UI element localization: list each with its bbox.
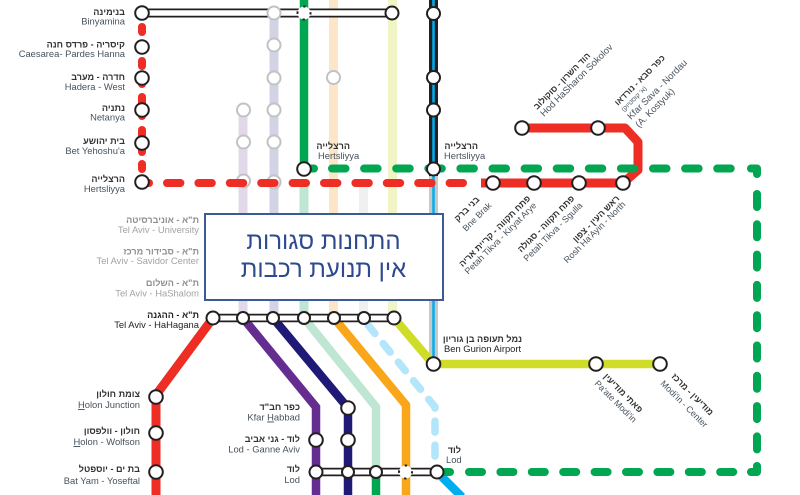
line: red dashed [142, 27, 470, 183]
label: Modiin Center: מודיעין - מרכז [670, 371, 716, 417]
interchange stations [298, 6, 412, 478]
label: Bet Yehoshua [65, 136, 126, 156]
label: Petah Tikva Kiryat Arye: פתח תקווה - קריית אריה [457, 193, 533, 269]
label: Holon Junction: Holon Junction [78, 399, 140, 410]
double track: HaHagana [213, 314, 394, 322]
label: Hertsliyya east [444, 141, 486, 161]
label: Tel Aviv HaHagana: ת"א - ההגנה [147, 310, 199, 320]
label: Rosh HaAyin North: ראש העין - צפון [571, 193, 621, 244]
label: Caesarea [19, 40, 126, 59]
label: Hertsliyya east: Hertsliyya [444, 150, 486, 161]
label: Netanya: נתניה [102, 103, 125, 113]
label: Binyamina: בנימינה [93, 7, 125, 17]
label: Holon Wolfson [73, 426, 140, 447]
label: Tel Aviv HaHagana [114, 310, 200, 330]
line: light blue dashed [368, 325, 435, 472]
label: Hertsliyya west [84, 174, 126, 194]
label: Bat Yam [64, 464, 140, 486]
label: Lod west [284, 464, 300, 485]
double track: Binyamina [142, 8, 392, 18]
label: Netanya [90, 103, 126, 122]
label: Lod Ganne Aviv: לוד - גני אביב [245, 434, 300, 444]
label: Tel Aviv Savidor: ת"א - סבידור מרכז [123, 246, 199, 256]
label: Lod east [446, 445, 462, 465]
label: Hertsliyya west: הרצלייה [91, 174, 125, 184]
label: Netanya: Netanya [90, 112, 126, 122]
label: Tel Aviv Savidor [97, 246, 199, 266]
label: Bne Brak: בני ברק [452, 194, 482, 224]
label: Kfar Sava: (A. Kostyuk) [633, 86, 677, 129]
faded lines: closed section [243, 0, 392, 318]
label: Hod HaSharon: הוד השרון - סוקולוב [531, 50, 592, 111]
label: Petah Tikva Sgulla: Petah Tikva - Sgulla [522, 200, 584, 263]
line: red solid Hod HaSharon loop [481, 128, 638, 183]
label: Caesarea: Caesarea- Pardes Hanna [19, 48, 126, 59]
label: Kfar Habbad [247, 402, 300, 422]
label: Tel Aviv HaHagana: Tel Aviv - HaHagana [114, 319, 200, 330]
label: Kfar Sava: כפר סבא - נורדאו [612, 53, 667, 107]
line: purple [243, 318, 316, 495]
line: red diagonal to Bat Yam [156, 318, 213, 495]
line: navy [273, 318, 348, 495]
label: Holon Wolfson: Holon - Wolfson [73, 436, 140, 447]
line: lime to Modiin [394, 318, 660, 364]
label: Binyamina [81, 7, 126, 26]
label: Kfar Habbad: כפר חב"ד [259, 402, 300, 412]
line: black and blue trunk [429, 0, 438, 364]
label: Rosh HaAyin North: Rosh Ha'Ayin - North [562, 199, 627, 265]
callout: stations closed: התחנות סגורות [246, 228, 401, 255]
label: Paate Modiin: פאתי מודיעין [602, 371, 645, 415]
label: Ben Gurion Airport: נמל תעופה בן גוריון [443, 334, 522, 344]
label: Bet Yehoshua: Bet Yehoshu'a [65, 145, 126, 156]
label: Kfar Sava: Kfar Sava - Nordau [625, 57, 689, 121]
line: green solid north [300, 0, 308, 169]
label: Hertsliyya centre: הרצלייה [316, 141, 350, 151]
label: Hadera: Hadera - West [65, 81, 125, 92]
label: Lod east: לוד [448, 445, 461, 455]
label: Bne Brak [452, 194, 494, 233]
label: Lod Ganne Aviv [228, 434, 300, 454]
line: orange [334, 318, 406, 495]
label: Hadera [65, 72, 125, 92]
label: Lod west: Lod [284, 474, 300, 485]
stations [135, 6, 667, 479]
label: Holon Junction [78, 389, 140, 410]
label: Lod Ganne Aviv: Lod - Ganne Aviv [228, 444, 300, 454]
label: Petah Tikva Kiryat Arye: Petah Tikva - Kiryat Arye [463, 200, 538, 276]
label: Ben Gurion Airport [443, 334, 522, 354]
label: Lod east: Lod [446, 454, 462, 465]
label: Bet Yehoshua: בית יהושע [83, 136, 125, 146]
label: Tel Aviv University: Tel Aviv - University [118, 224, 199, 235]
label: Hertsliyya east: הרצלייה [444, 141, 478, 151]
label: Tel Aviv HaShalom: Tel Aviv - HaShalom [115, 288, 199, 298]
callout: stations closed: אין תנועת רכבות [241, 256, 406, 283]
line: pale green [304, 318, 376, 472]
label: Hod HaSharon: Hod HaSharon Sokolov [538, 41, 615, 118]
label: Caesarea: קיסריה - פרדס חנה [47, 40, 125, 50]
label: Tel Aviv HaShalom: ת"א - השלום [146, 278, 199, 288]
label: Paate Modiin: Pa'ate Modi'in [593, 378, 639, 424]
label: Tel Aviv University [118, 215, 199, 235]
label: Kfar Habbad: Kfar Habbad [247, 412, 300, 422]
label: Ben Gurion Airport: Ben Gurion Airport [444, 343, 522, 354]
label: Hadera: חדרה - מערב [71, 72, 125, 82]
label: Tel Aviv HaShalom [115, 278, 199, 298]
label: Modiin Center: Modi'in - Center [659, 378, 710, 430]
callout: stations closed [205, 214, 443, 300]
label: Tel Aviv Savidor: Tel Aviv - Savidor Center [97, 255, 199, 266]
line: green dashed [304, 168, 757, 472]
label: Hertsliyya centre [316, 141, 360, 161]
label: Hertsliyya centre: Hertsliyya [318, 150, 360, 161]
label: Bne Brak: Bne Brak [461, 200, 494, 233]
label: Petah Tikva Sgulla: פתח תקווה - סגולה [516, 193, 577, 254]
label: Hertsliyya west: Hertsliyya [84, 183, 126, 194]
line: blue to south [437, 472, 462, 495]
double track: Lod [316, 468, 437, 476]
faded stations [237, 6, 340, 188]
label: Bat Yam: בת ים - יוספטל [79, 464, 140, 474]
label: Tel Aviv University: ת"א - אוניברסיטה [126, 215, 199, 225]
label: Kfar Sava: (א' קוסטיוק) [620, 85, 649, 113]
label: Holon Junction: צומת חולון [96, 389, 140, 399]
label: Lod west: לוד [287, 464, 300, 474]
label: Bat Yam: Bat Yam - Yoseftal [64, 475, 140, 486]
label: Binyamina: Binyamina [81, 16, 126, 26]
line: green solid south [372, 472, 380, 495]
label: Holon Wolfson: חולון - וולפסון [84, 426, 140, 436]
